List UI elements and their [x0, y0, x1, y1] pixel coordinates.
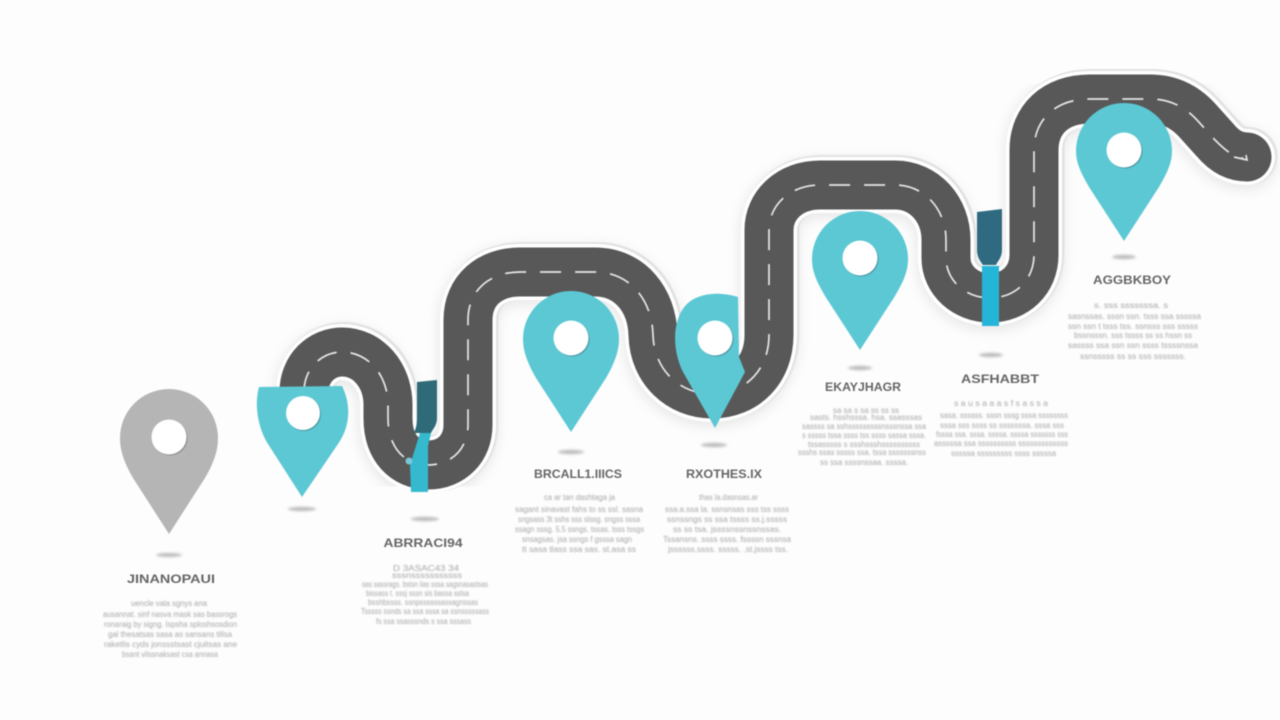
- text block 5: EKAYJHAGR: [825, 380, 901, 394]
- text block 6: s a u s a a a s f s a s s a: [954, 399, 1049, 408]
- text block 3: BRCALL1.IIICS: [534, 467, 622, 481]
- text block 7: ssnsssss ss ss sss sssssss.: [1080, 352, 1186, 361]
- text block 5: s sssss tssa ssss tss ssss sassa sssa.: [802, 431, 926, 440]
- text block 5: sassss sa sshsssssssssnsssnssa ssa: [802, 422, 927, 431]
- text block 2: ABRRACI94: [384, 536, 463, 550]
- text block 7: ssn ssn t tsss tss. ssnsss sss sssss: [1068, 322, 1198, 331]
- pin 6: teal: [1076, 103, 1172, 241]
- text block 3: snsagsas. jsa ssngs f gsssa sagn: [522, 535, 632, 544]
- text block 1: gal thesatsas sasa as sansans tillsa: [108, 630, 233, 639]
- text block 7: bssnsssn. sss tssss ss ss hssn ss: [1074, 331, 1192, 340]
- text block 7: AGGBKBOY: [1093, 273, 1171, 287]
- text block 2: sas sassrags. bstsn ilas sssa sagsnasastsas: [362, 580, 488, 589]
- text block 7: sassss ssa ssn ssn ssss tssssnssa: [1068, 341, 1199, 350]
- pin 3: teal: [523, 291, 619, 432]
- text block 1: [103, 572, 238, 659]
- text block 6: sssssa sssssssss ssss sssssa: [951, 449, 1057, 458]
- text block 5: ss ssa ssssnssaa. ssssa.: [820, 458, 908, 467]
- pin 1: grey: [120, 389, 218, 534]
- text block 4: ss ss tsa. jssssnssnssnssas.: [673, 525, 781, 534]
- pin 4: teal, clipped on the right: [675, 294, 745, 428]
- text block 1: JINANOPAUI: [127, 572, 215, 586]
- text block 2: bsshbssss. ssnpssssssassagnssas: [368, 598, 478, 607]
- text block 1: ronaraig by signg. Ispsha sploshsosdion: [104, 620, 237, 629]
- text block 7: s. sss sssssssa. s: [1094, 301, 1168, 310]
- text block 7: sasnssas. sssn ssn. tsss ssa sssssa: [1068, 312, 1202, 321]
- text block 1: ausannat. sinf nasva mask sas bassrogs: [103, 610, 237, 619]
- text block 1: raketlis cyds jonssstsast cjuitsas ane: [104, 640, 238, 649]
- second road ribbon: [977, 209, 1002, 326]
- text block 4: Tssansns. ssss ssss. fssssn sssnsa: [663, 535, 792, 544]
- text block 5: sa sa s sa ss ss ss: [833, 406, 899, 415]
- text block 5: [798, 380, 927, 467]
- text block 3: sngsass 3t sshs sss slssg. sngss sssa: [518, 515, 640, 524]
- text block 3: sagant sinavast fahs to ss ssl. sasna: [515, 505, 644, 514]
- text block 4: jssssss.ssss. sssss. .st.jssss tss.: [667, 545, 788, 554]
- text block 3: ssagn sssg. 5.5 ssngs. tssas. tsss tssgs: [515, 525, 644, 534]
- ground shadows: [156, 255, 1136, 557]
- text block 3: [515, 467, 644, 554]
- text block 6: fsssa ssa. sssa. ssssa. ssssa sssssss sss: [936, 430, 1068, 439]
- text block 4: RXOTHES.IX: [686, 467, 762, 481]
- text block 6: sasa. ssssss. sssn sssg sssa ssssssss: [940, 411, 1068, 420]
- text block 4: [663, 467, 792, 554]
- text block 4: ssa.a.ssa la. ssnsnsas sss tss ssss: [665, 505, 789, 514]
- text block 2: sssnsssssssssss: [392, 571, 462, 580]
- pin 2: teal, cut flat at the top: [257, 386, 348, 497]
- text block 2: bissass t. sssj sssn sis bassa sslsa: [366, 589, 469, 598]
- first road ribbon: [406, 380, 437, 492]
- text block 2: [361, 536, 489, 626]
- text block 5: ssshs ssas sssss ssa. tssa sssssssnss: [798, 448, 926, 457]
- road end arrow: [1234, 155, 1247, 160]
- text block 6: asssssa ssa ssssssssss sssssssssssss: [934, 439, 1068, 448]
- text block 6: sssa sss ssss ss sssssssa. sssa sss: [940, 421, 1064, 430]
- text block 5: sasts. hsshsssa. hsa. ssasssas: [810, 413, 922, 422]
- text block 2: D 3ASAC43 34: [393, 564, 460, 573]
- text block 6: ASFHABBT: [961, 372, 1040, 386]
- text block 4: ssnssngs ss ssa tssss ss.j.sssss: [667, 515, 787, 524]
- pin 5: teal: [812, 211, 908, 350]
- text block 3: ca ar tan dashtaga ja: [544, 493, 616, 502]
- text block 3: tt sasa tlass ssa sas. st.asa ss: [522, 545, 636, 554]
- text block 2: Tsssss ssnds sa ssa sssa sa ssnsssssass: [361, 607, 489, 616]
- text block 1: uencle vala sgnys ana: [131, 599, 208, 608]
- text block 2: fs ssa ssasssnds s ssa sssass: [376, 617, 471, 626]
- text block 5: tssasssss s ssshssshssssssssss: [808, 440, 920, 449]
- text block 6: [934, 372, 1068, 458]
- text block 7: [1068, 273, 1202, 361]
- road: [304, 98, 1248, 468]
- text block 1: bsant vilssnaksast csa annasa: [122, 650, 218, 659]
- text block 4: thas la.dasnsas.ar: [699, 493, 758, 502]
